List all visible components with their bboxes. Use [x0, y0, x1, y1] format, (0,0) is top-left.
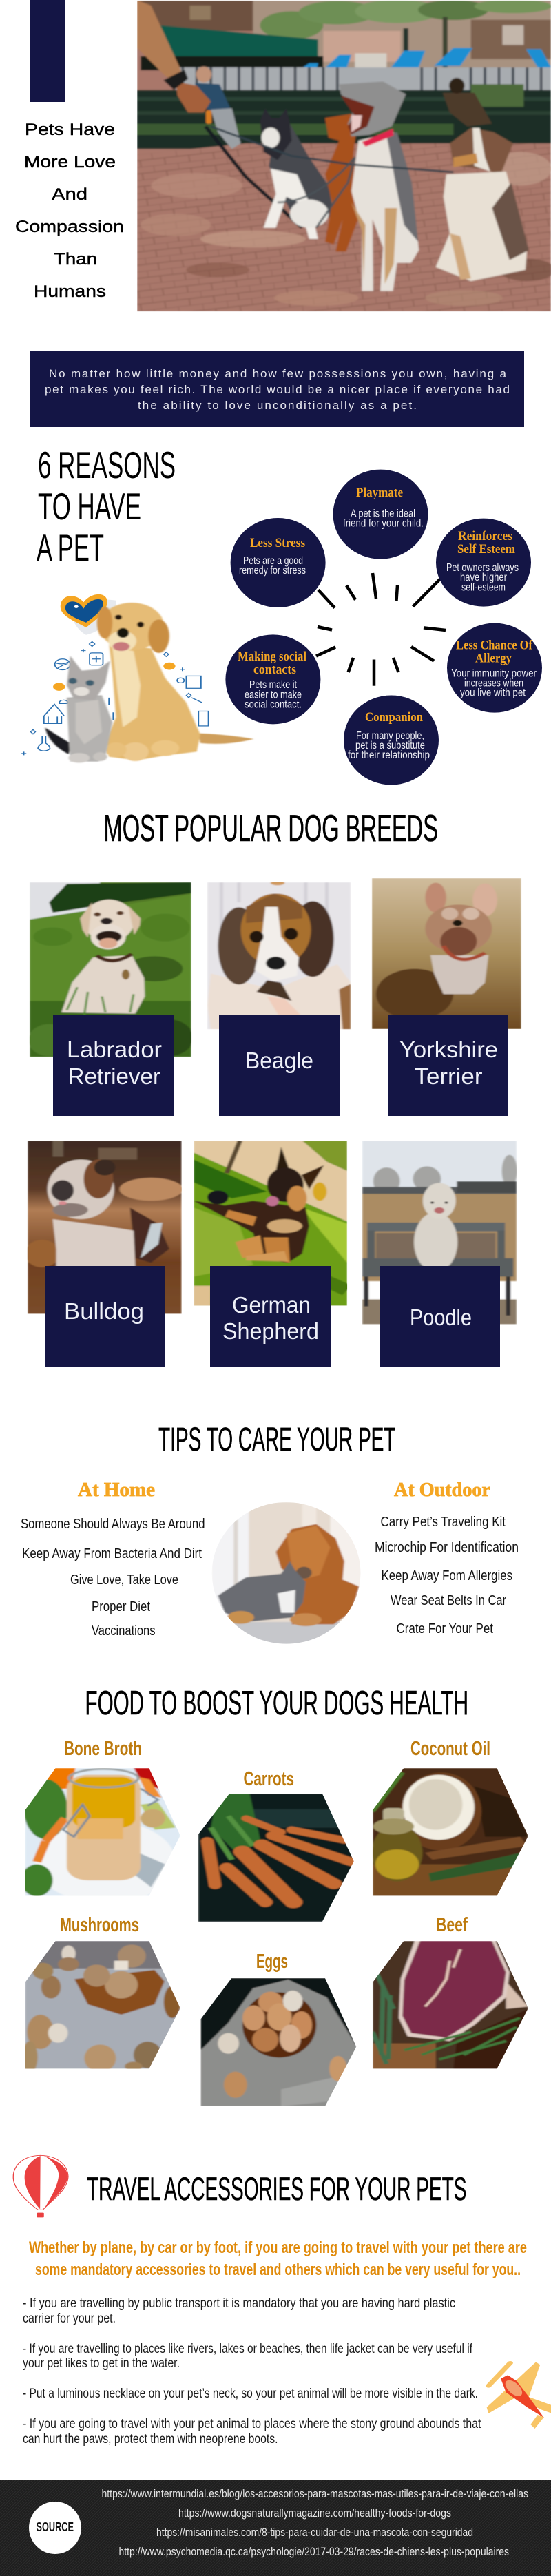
travel advice paragraphs: carrier for your pet. [23, 2311, 116, 2326]
reason: reinforces self esteem: have higher [460, 572, 507, 583]
photo: dog and cat in oval [212, 1502, 362, 1645]
title: And [52, 185, 87, 204]
reason: less chance of allergy: Your immunity power [451, 668, 537, 679]
reason: companion: For many people, [356, 730, 424, 742]
lead paragraph [29, 2239, 527, 2279]
list: at home tips: Vaccinations [92, 1623, 156, 1639]
breed label: german shepherd: Shepherd [222, 1318, 319, 1344]
breed label: labrador retriever: Labrador [67, 1037, 162, 1062]
photo: german shepherd [194, 1141, 347, 1306]
breed label: beagle: Beagle [245, 1048, 313, 1073]
reason: companion: Companion [365, 710, 423, 725]
breed label: labrador retriever [53, 1015, 174, 1116]
reason: reinforces self esteem: Reinforces [458, 529, 512, 543]
reason: companion [344, 696, 439, 785]
reason: reinforces self esteem: Pet owners always [446, 562, 519, 574]
photo: carrots hexagon [198, 1794, 354, 1922]
list: at home tips: Proper Diet [92, 1599, 150, 1614]
title: Than [54, 250, 97, 269]
photo: labrador [28, 882, 194, 1057]
food label: coconut oil: Coconut Oil [410, 1738, 490, 1760]
reason: making social contacts [225, 634, 320, 724]
icons: pet care line drawings [38, 653, 209, 751]
reason: making social contacts: Making social [238, 650, 306, 664]
breed label: labrador retriever: Retriever [67, 1063, 160, 1089]
list: at outdoor tips [375, 1515, 519, 1637]
travel advice paragraphs: can hurt the paws, protect them with neoprene boots. [23, 2431, 278, 2447]
food label: beef: Beef [436, 1914, 468, 1936]
travel advice paragraphs: - If you are travelling by public transport it is mandatory that you are having hard plastic [23, 2296, 455, 2311]
title: More Love [24, 153, 116, 172]
reason: less chance of allergy: increases when [464, 677, 523, 689]
breed label: beagle [219, 1015, 340, 1116]
icon: airplane [487, 2362, 551, 2429]
reason: making social contacts: contacts [253, 663, 296, 677]
reason: playmate: Playmate [356, 486, 403, 500]
breed label: german shepherd: German [232, 1292, 311, 1318]
puppy [97, 603, 253, 761]
title: Compassion [15, 218, 124, 236]
reason: less chance of allergy: you live with pet [460, 687, 526, 698]
source links [102, 2487, 528, 2558]
reason: less stress: Pets are a good [243, 555, 303, 567]
navy accent bar [30, 0, 65, 102]
food label: eggs: Eggs [256, 1951, 288, 1973]
heading: 6 reasons: TO HAVE [38, 485, 141, 528]
title: Humans [34, 282, 106, 301]
breed label: yorkshire terrier: Terrier [415, 1063, 483, 1089]
list: at outdoor tips: Crate For Your Pet [397, 1621, 493, 1637]
list: at home tips: Give Love, Take Love [70, 1572, 178, 1588]
list: at home tips [21, 1517, 205, 1639]
reason: less chance of allergy [447, 623, 542, 713]
photo: beef hexagon [373, 1941, 528, 2069]
photo: eggs hexagon [200, 1978, 356, 2106]
icon: heart [61, 594, 116, 635]
reason: companion: for their relationship [348, 749, 430, 761]
breed label: poodle [380, 1266, 500, 1367]
photo: coconut oil hexagon [372, 1768, 528, 1896]
reason: less chance of allergy: Allergy [475, 651, 512, 665]
photo: poodle [362, 1141, 517, 1325]
photo: beagle [207, 881, 351, 1029]
heading: 6 reasons: A PET [37, 526, 104, 569]
intro quote panel: No matter how little money and how few possessions you own, having a [49, 367, 507, 380]
breed label: bulldog: Bulldog [64, 1298, 144, 1324]
source badge: SOURCE [36, 2520, 74, 2534]
photo: dogs on leash in a park [137, 0, 551, 311]
breed label: german shepherd [210, 1266, 331, 1367]
list: at outdoor tips: Microchip For Identification [375, 1540, 519, 1555]
title [15, 121, 124, 301]
photo: yorkshire terrier [372, 878, 521, 1029]
reason: making social contacts: Pets make it [249, 679, 298, 691]
heading: 6 reasons: 6 REASONS [38, 444, 176, 486]
title: Pets Have [25, 121, 115, 139]
intro quote panel: the ability to love unconditionally as a pet. [138, 399, 417, 412]
column heading: at home: At Home [78, 1479, 155, 1501]
breed label: bulldog [45, 1266, 165, 1367]
intro quote panel [30, 351, 524, 427]
intro quote panel: pet makes you feel rich. The world would be a nicer place if everyone had [45, 383, 510, 396]
column heading: at outdoor: At Outdoor [394, 1479, 490, 1501]
reason: making social contacts: social contact. [245, 698, 302, 711]
photo: bone broth hexagon [21, 1768, 180, 1903]
footer panel [0, 2480, 551, 2576]
food label: mushrooms: Mushrooms [60, 1914, 139, 1936]
reason: less stress: remedy for stress [239, 565, 306, 577]
reason: making social contacts: easier to make [245, 689, 302, 701]
photo: mushrooms hexagon [22, 1941, 180, 2073]
heading: 6 reasons [37, 444, 176, 569]
reason: playmate: friend for your child. [343, 518, 424, 530]
food label: carrots: Carrots [244, 1768, 294, 1790]
photo: bulldog [25, 1141, 183, 1314]
reason: less chance of allergy: Less Chance Of [456, 638, 533, 653]
list: at outdoor tips: Wear Seat Belts In Car [391, 1593, 506, 1608]
reason: playmate [333, 470, 428, 559]
list: at home tips: Keep Away From Bacteria And Dirt [22, 1546, 202, 1561]
reason: reinforces self esteem: Self Esteem [457, 542, 515, 557]
source badge [29, 2502, 81, 2554]
reason: reinforces self esteem [436, 519, 531, 607]
food label: bone broth: Bone Broth [64, 1738, 142, 1760]
list: at outdoor tips: Keep Away Fom Allergies [382, 1568, 512, 1583]
breed label: yorkshire terrier: Yorkshire [399, 1037, 498, 1062]
radiating rays [316, 573, 446, 686]
source links: https://misanimales.com/8-tips-para-cuidar-de-una-mascota-con-seguridad [156, 2526, 473, 2539]
kitten [45, 656, 112, 762]
list: at home tips: Someone Should Always Be Around [21, 1517, 205, 1532]
travel advice paragraphs [23, 2296, 481, 2447]
reason: less stress [231, 518, 326, 607]
travel advice paragraphs: your pet likes to get in the water. [23, 2356, 180, 2371]
list: at outdoor tips: Carry Pet’s Traveling Kit [380, 1515, 506, 1530]
illustration: puppy and kitten with heart [21, 594, 253, 762]
reason: playmate: A pet is the ideal [351, 508, 415, 519]
source links: https://www.dogsnaturallymagazine.com/healthy-foods-for-dogs [178, 2506, 451, 2520]
breed label: poodle: Poodle [410, 1305, 472, 1330]
breed label: yorkshire terrier [388, 1015, 508, 1116]
reason: less stress: Less Stress [250, 536, 305, 550]
icon: hot air balloon [13, 2155, 68, 2217]
reason: reinforces self esteem: self-esteem [461, 581, 506, 594]
reason: companion: pet is a substitute [355, 740, 425, 751]
